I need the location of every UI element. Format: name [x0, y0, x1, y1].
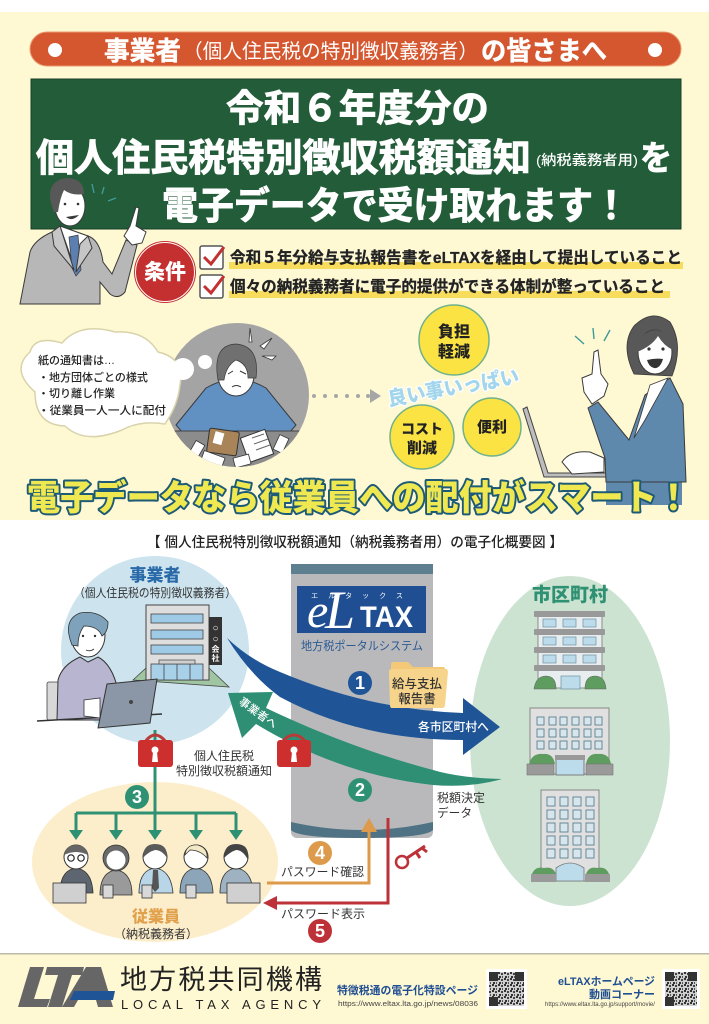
step 2: [348, 778, 372, 802]
step 2: 2: [355, 780, 365, 800]
conditions badge: 条件: [144, 261, 186, 284]
benefit circle: cost reduction: コスト: [401, 421, 443, 437]
thought bubble: paper notice: [21, 329, 212, 437]
blue arrow: salary report to municipalities: [227, 638, 500, 755]
conditions panel: [134, 242, 683, 302]
step 5: [308, 919, 332, 943]
title panel: 個人住民税特別徴収税額通知: [36, 138, 531, 180]
employee 5: [220, 844, 260, 903]
footer: LOCAL TAX AGENCY: [121, 997, 321, 1012]
municipality ellipse: [470, 576, 670, 906]
company building: [133, 605, 229, 687]
title panel: (納税義務者用): [536, 152, 638, 168]
checkbox 1: [200, 246, 224, 269]
step 3: 3: [132, 787, 142, 807]
eLTAX homepage link: [545, 975, 655, 1008]
tax data label: 税額決定: [437, 791, 485, 805]
lock icon right: [277, 735, 311, 767]
eLTAX logo: [297, 580, 426, 640]
company building: 社: [212, 653, 220, 663]
diagram title: 【 個人住民税特別徴収税額通知（納税義務者用）の電子化概要図 】: [147, 534, 563, 550]
top banner: （個人住民税の特別徴収義務者）: [183, 40, 478, 63]
thought bubble: paper notice: ・従業員一人一人に配付: [38, 403, 166, 417]
eLTAX logo: エルタックス: [311, 591, 413, 600]
title panel: 令和６年度分の: [226, 88, 489, 129]
icon: key: [396, 846, 427, 868]
building 1: [534, 611, 606, 689]
eLTAX homepage link: 動画コーナー: [589, 987, 655, 1001]
employer circle: （個人住民税の特別徴収義務者）: [74, 585, 236, 600]
footer: [0, 953, 709, 1024]
step 3: [125, 785, 149, 809]
eLTAX logo: e: [307, 585, 328, 638]
employer person: [37, 612, 162, 728]
employee 4: [180, 845, 213, 898]
eLTAX logo: L: [324, 580, 355, 640]
highlights: [229, 262, 683, 298]
company building: ○: [212, 623, 219, 634]
report folder: 給与支払: [392, 676, 442, 691]
report folder: 報告書: [398, 691, 436, 706]
employee 1: [53, 845, 93, 903]
special collection page link: https://www.eltax.lta.go.jp/news/08036: [338, 1001, 478, 1008]
special collection page link: [337, 983, 478, 1008]
building 2: [527, 708, 613, 775]
report folder: [389, 662, 448, 708]
distribution arrows: [69, 730, 243, 840]
QR code 2: [662, 969, 700, 1009]
notice label: [176, 749, 272, 778]
headline: 電子データなら従業員への配付がスマート！: [27, 478, 690, 518]
password display label: パスワード表示: [281, 907, 365, 921]
top banner: の皆さまへ: [481, 36, 607, 66]
LTA logo: [18, 967, 115, 1007]
employees ellipse: 従業員: [132, 907, 180, 926]
special collection page link: 特徴税通の電子化特設ページ: [337, 983, 478, 997]
employee 2: [100, 845, 132, 898]
top banner: 事業者: [104, 36, 181, 66]
illustration: pointing man: [20, 178, 146, 304]
tax data label: データ: [437, 805, 472, 820]
good things text: 良い事いっぱい: [386, 364, 521, 411]
step 4: 4: [315, 843, 325, 863]
benefit circle: cost reduction: 削減: [407, 439, 437, 457]
QR code 1: [486, 969, 527, 1009]
checkbox 2: [200, 275, 224, 298]
eLTAX homepage link: eLTAXホームページ: [558, 975, 655, 988]
tax data label: [437, 791, 485, 820]
step 1: 1: [355, 673, 365, 693]
condition 1 text: 令和５年分給与支払報告書をeLTAXを経由して提出していること: [230, 248, 682, 267]
eLTAX homepage link: https://www.eltax.lta.go.jp/support/movie/: [545, 1002, 655, 1008]
benefit circle: burden reduction: 負担: [438, 322, 470, 341]
eLTAX logo: TAX: [360, 601, 413, 634]
title panel: を: [640, 140, 672, 178]
step 4: [308, 841, 332, 865]
conditions badge: [134, 242, 196, 302]
benefit circle: burden reduction: [419, 305, 489, 375]
step 5: 5: [315, 921, 325, 941]
notice label: 個人住民税: [194, 749, 254, 763]
building 3: [531, 790, 610, 882]
company building: 会: [212, 644, 220, 654]
orange arrow: password check: [267, 818, 377, 883]
title panel: 電子データで受け取れます！: [162, 185, 629, 228]
company building: ○: [212, 634, 219, 645]
thought bubble: paper notice: ・地方団体ごとの様式: [38, 370, 148, 384]
step 1: [348, 671, 372, 695]
title panel: [31, 79, 681, 229]
eLTAX tower: [291, 564, 433, 838]
blue arrow: salary report to municipalities: 各市区町村へ: [418, 719, 489, 734]
municipality ellipse: 市区町村: [532, 583, 608, 606]
red arrow: password display: [263, 818, 388, 910]
benefit circle: convenience: [463, 398, 521, 456]
benefit circle: convenience: 便利: [477, 418, 507, 436]
top banner: [30, 32, 681, 66]
thought bubble: paper notice: ・切り離し作業: [38, 386, 115, 400]
employees ellipse: （納税義務者）: [114, 926, 198, 941]
password check label: パスワード確認: [281, 864, 364, 879]
lock icon left: [138, 735, 173, 767]
illustration: smiling woman with laptop: [523, 316, 686, 505]
benefit circle: burden reduction: 軽減: [438, 342, 470, 361]
agency name: 地方税共同機構: [120, 965, 322, 995]
employer circle: 事業者: [130, 565, 180, 585]
upper cream panel: [0, 12, 709, 520]
thought bubble: paper notice: 紙の通知書は…: [38, 353, 115, 367]
notice label: 特別徴収税額通知: [176, 763, 272, 778]
employee group icons: [53, 844, 260, 903]
benefit circle: cost reduction: [390, 405, 454, 469]
green arrow: tax data to employer: [228, 692, 502, 786]
employer circle: [37, 556, 249, 744]
illustration: worried woman: [169, 323, 309, 467]
condition 2 text: 個々の納税義務者に電子的提供ができる体制が整っていること: [230, 277, 665, 296]
dotted arrow: [312, 389, 381, 403]
employees ellipse: [32, 782, 278, 942]
green arrow: tax data to employer: 事業者へ: [236, 694, 280, 731]
portal system caption: 地方税ポータルシステム: [301, 638, 423, 653]
employee 3: [139, 844, 173, 898]
